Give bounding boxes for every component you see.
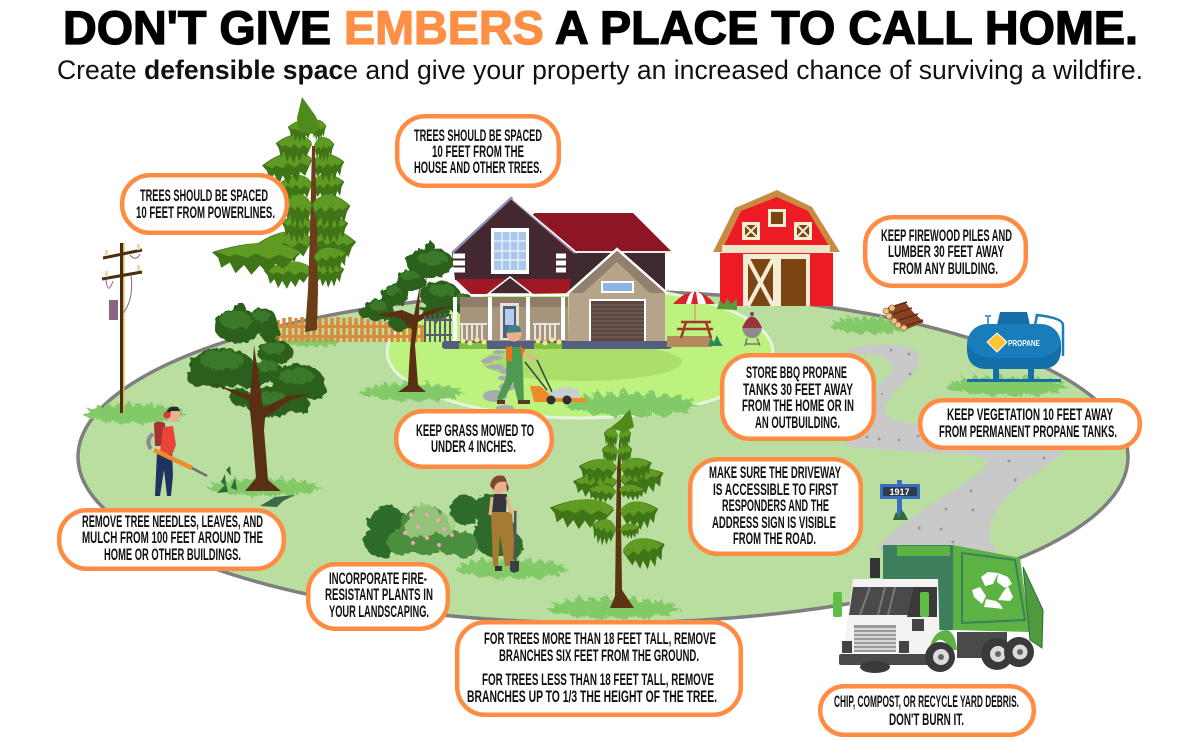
subtitle: Create defensible space and give your property an increased chance of surviving a wildfire.	[57, 55, 1143, 85]
callout: grass: UNDER 4 INCHES.	[431, 438, 516, 456]
title: DON'T GIVE EMBERS A PLACE TO CALL HOME.	[63, 1, 1138, 54]
callout: tree spacing	[397, 116, 559, 186]
flower beds	[459, 338, 562, 349]
callout: driveway	[690, 459, 861, 554]
callout: firewood	[865, 217, 1026, 286]
small pine tree	[550, 409, 666, 608]
address sign: 1917	[889, 487, 910, 497]
patio with umbrella and picnic table	[667, 292, 723, 347]
gardener with shovel	[490, 475, 519, 573]
callout: tree branches: FOR TREES LESS THAN 18 FEET TALL, REMOVE	[482, 671, 714, 689]
callout: plants: INCORPORATE FIRE-	[329, 570, 427, 588]
callout: BBQ propane: AN OUTBUILDING.	[755, 414, 840, 432]
house	[442, 198, 672, 349]
garbage truck	[833, 545, 1043, 673]
house window	[491, 228, 529, 274]
barn windows	[742, 209, 812, 240]
firewood logs	[883, 302, 924, 331]
callout: tree branches	[457, 622, 741, 715]
tall pine tree	[212, 97, 358, 332]
callout: driveway: FROM THE ROAD.	[733, 530, 816, 548]
callout: firewood: FROM ANY BUILDING.	[893, 260, 998, 278]
lawn mower	[525, 360, 587, 404]
callout: yard debris	[820, 686, 1034, 735]
recycling symbol	[972, 572, 1013, 609]
address sign	[880, 480, 920, 520]
stepping stones	[481, 350, 515, 411]
barn doors	[743, 254, 810, 306]
callout: tree needles: HOME OR OTHER BUILDINGS.	[104, 546, 241, 564]
callout: driveway: ADDRESS SIGN IS VISIBLE	[712, 514, 836, 532]
shrubs	[364, 494, 523, 558]
callout: tree spacing: HOUSE AND OTHER TREES.	[414, 159, 542, 177]
callout: driveway: IS ACCESSIBLE TO FIRST	[713, 481, 838, 499]
callout: tree needles	[59, 510, 284, 569]
callout: grass	[396, 411, 552, 467]
propane tank	[967, 312, 1063, 382]
callout: plants: RESISTANT PLANTS IN	[325, 586, 433, 604]
man mowing the lawn	[497, 325, 587, 404]
broadleaf tree near house	[359, 241, 474, 392]
callout: tree branches: BRANCHES SIX FEET FROM THE GROUND.	[499, 647, 699, 665]
worker with leaf blower	[148, 407, 207, 496]
truck cab	[833, 579, 957, 665]
callout: plants	[308, 564, 448, 629]
callout: grass: KEEP GRASS MOWED TO	[416, 422, 534, 440]
truck wheels	[860, 637, 1034, 673]
grill	[742, 312, 762, 346]
callout: driveway: RESPONDERS AND THE	[722, 497, 829, 515]
barn tuft	[717, 298, 737, 310]
callout: powerlines: TREES SHOULD BE SPACED	[140, 187, 268, 205]
callout: plants: YOUR LANDSCAPING.	[329, 603, 429, 621]
driveway	[843, 344, 1067, 558]
lawn ellipse	[78, 291, 1128, 623]
propane tank: PROPANE	[1008, 339, 1041, 348]
callout: BBQ propane: STORE BBQ PROPANE	[746, 364, 847, 382]
callout: powerlines: 10 FEET FROM POWERLINES.	[136, 204, 275, 222]
callout: tree needles: REMOVE TREE NEEDLES, LEAVES, AND	[82, 513, 263, 531]
callout: BBQ propane: TANKS 30 FEET AWAY	[743, 381, 853, 399]
broadleaf tree near fence	[187, 302, 326, 491]
grass patches	[83, 314, 1070, 620]
fence	[262, 317, 424, 342]
mowed front lawn	[387, 286, 773, 418]
callout: BBQ propane	[722, 355, 874, 439]
callout: BBQ propane: FROM THE HOME OR IN	[742, 397, 854, 415]
callout: tree branches: FOR TREES MORE THAN 18 FEET TALL, REMOVE	[484, 630, 716, 648]
callout: firewood: LUMBER 30 FEET AWAY	[888, 243, 1004, 261]
callout: driveway: MAKE SURE THE DRIVEWAY	[709, 464, 841, 482]
callout: yard debris: DON'T BURN IT.	[889, 711, 964, 729]
callout: yard debris: CHIP, COMPOST, OR RECYCLE YARD DEBRIS.	[834, 693, 1019, 711]
gate	[425, 313, 452, 342]
callout: propane vegetation	[920, 400, 1140, 448]
garage door	[589, 299, 646, 341]
callout: tree spacing: TREES SHOULD BE SPACED	[414, 127, 542, 145]
callout: tree spacing: 10 FEET FROM THE	[432, 143, 524, 161]
barn	[713, 190, 840, 310]
callout: firewood: KEEP FIREWOOD PILES AND	[881, 227, 1012, 245]
callout: tree needles: MULCH FROM 100 FEET AROUND THE	[82, 529, 263, 547]
small plants	[217, 466, 295, 507]
power pole	[102, 243, 142, 413]
callout: powerlines	[122, 175, 287, 233]
callout: tree branches: BRANCHES UP TO 1/3 THE HEIGHT OF THE TREE.	[467, 688, 717, 706]
